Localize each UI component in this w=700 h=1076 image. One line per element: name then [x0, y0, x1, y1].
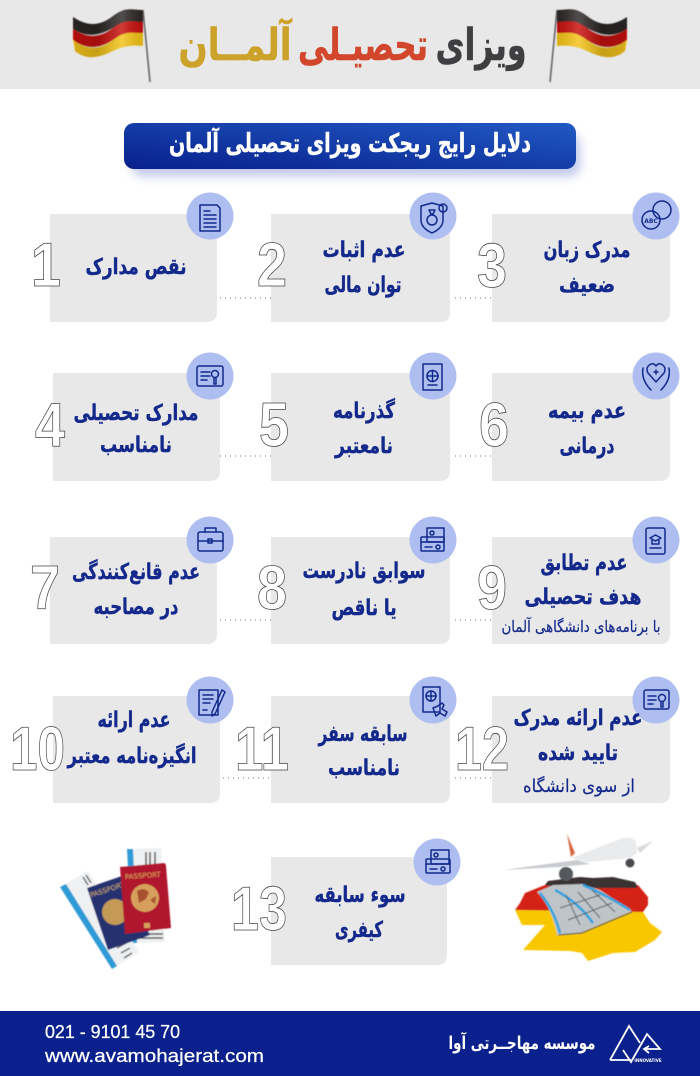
icon: letter and pen [199, 690, 225, 716]
illustration: passports and tickets [60, 848, 171, 969]
icon: certificate [197, 366, 223, 386]
title: تحصیـلی [298, 20, 428, 71]
section heading bar [124, 123, 580, 176]
icon: document [200, 205, 220, 231]
map red [515, 885, 648, 912]
reason 12: تایید شده [538, 741, 618, 766]
reason 11: سابقه سفر [318, 722, 408, 747]
footer organisation name: موسسه مهاجــرتی آوا [448, 1031, 596, 1054]
reason 6 [479, 352, 680, 481]
reason 9: با برنامه‌های دانشگاهی آلمان [502, 617, 660, 637]
reason 5 [259, 352, 456, 481]
icon: briefcase [198, 528, 223, 551]
reason 5: نامعتبر [334, 434, 393, 459]
reason 8: سوابق نادرست [302, 559, 426, 584]
reason 10: انگیزه‌نامه معتبر [67, 742, 196, 769]
icon: money shield [421, 203, 447, 233]
illustration: plane over germany map [503, 834, 662, 961]
reason 10: عدم ارائه [98, 708, 170, 733]
reason 8: یا ناقص [332, 596, 396, 621]
icon: records [421, 528, 444, 551]
icon: passport [423, 364, 442, 390]
header band [0, 0, 700, 89]
tail [567, 834, 575, 857]
reason 1: 1 [31, 231, 61, 300]
icon: verified certificate [644, 690, 669, 709]
reason 3: ضعیف [559, 273, 615, 298]
reason 5: 5 [259, 391, 289, 460]
icon: hands and heart [643, 364, 669, 390]
reason 10 [10, 676, 234, 803]
icon: right german flag [550, 9, 627, 82]
reason 11 [235, 676, 456, 803]
reason 3: مدرک زبان [544, 238, 630, 263]
reason 9: عدم تطابق [540, 551, 628, 576]
fuselage [571, 838, 637, 862]
reason 12: عدم ارائه مدرک [514, 706, 642, 731]
reason 11: نامناسب [328, 756, 400, 781]
footer contact: www.avamohajerat.com [44, 1046, 264, 1066]
reason 4 [35, 352, 234, 481]
reason 8: 8 [257, 554, 287, 623]
reason 3 [477, 192, 680, 322]
reason 3: 3 [477, 232, 507, 301]
map black [545, 877, 638, 888]
icon: degree tablet [646, 528, 665, 554]
reason 6: عدم بیمه [548, 399, 626, 424]
reason 7: در مصاحبه [94, 595, 178, 620]
reason 8 [257, 516, 456, 644]
reason 11: 11 [235, 715, 289, 784]
title [178, 17, 526, 71]
icon: logo: INNOVATIVE [634, 1058, 662, 1063]
reason 13: کیفری [335, 918, 383, 943]
reason 13: سوء سابقه [314, 883, 406, 908]
reason 12: از سوی دانشگاه [523, 775, 635, 797]
engines [559, 867, 573, 881]
map gold [515, 910, 662, 961]
reason 2: 2 [257, 231, 287, 300]
reason 7: 7 [30, 554, 60, 623]
reason 6: 6 [479, 391, 509, 460]
reason 9: 9 [477, 554, 507, 623]
reason 4: نامناسب [100, 433, 172, 458]
reason 12: 12 [455, 715, 509, 784]
footer contact: 021 - 9101 45 70 [45, 1022, 180, 1042]
section heading bar: دلایل رایج ریجکت ویزای تحصیلی آلمان [169, 127, 531, 159]
front ticket [60, 871, 139, 969]
reason 10: 10 [10, 715, 65, 784]
reason 6: درمانی [560, 434, 614, 459]
dotted connectors [220, 298, 491, 778]
reason 12 [455, 676, 680, 803]
red passport: PASSPORT [125, 871, 162, 881]
wing [503, 860, 590, 870]
reason 13: 13 [231, 875, 287, 944]
reason 1 [31, 192, 234, 322]
reason 1: نقص مدارک [86, 255, 186, 280]
reason 3: ABC [644, 218, 658, 225]
icon: logo [610, 1026, 662, 1063]
icon: left german flag [73, 9, 150, 82]
tickets [537, 884, 632, 935]
reason 5: گذرنامه [333, 397, 395, 424]
footer band [0, 1011, 700, 1076]
reason 13 [231, 838, 460, 965]
icon: travel passport [423, 687, 447, 716]
blue passport: PASSPORT [89, 881, 126, 899]
reason 4: مدارک تحصیلی [74, 401, 198, 426]
reason 2: عدم اثبات [322, 238, 406, 263]
reason 4: 4 [35, 391, 65, 460]
title: ویزای [436, 20, 526, 71]
reason 2 [257, 192, 456, 322]
back ticket [127, 848, 165, 943]
title: آلمــان [178, 17, 292, 71]
reason 7 [30, 516, 234, 644]
reason 2: توان مالی [324, 273, 402, 298]
footer contact [44, 1022, 264, 1066]
reason 9 [477, 516, 680, 644]
reason 7: عدم قانع‌کنندگی [72, 558, 200, 585]
icon: criminal record [426, 850, 450, 873]
icon: language bubbles [642, 201, 671, 229]
reason 9: هدف تحصیلی [524, 585, 642, 610]
